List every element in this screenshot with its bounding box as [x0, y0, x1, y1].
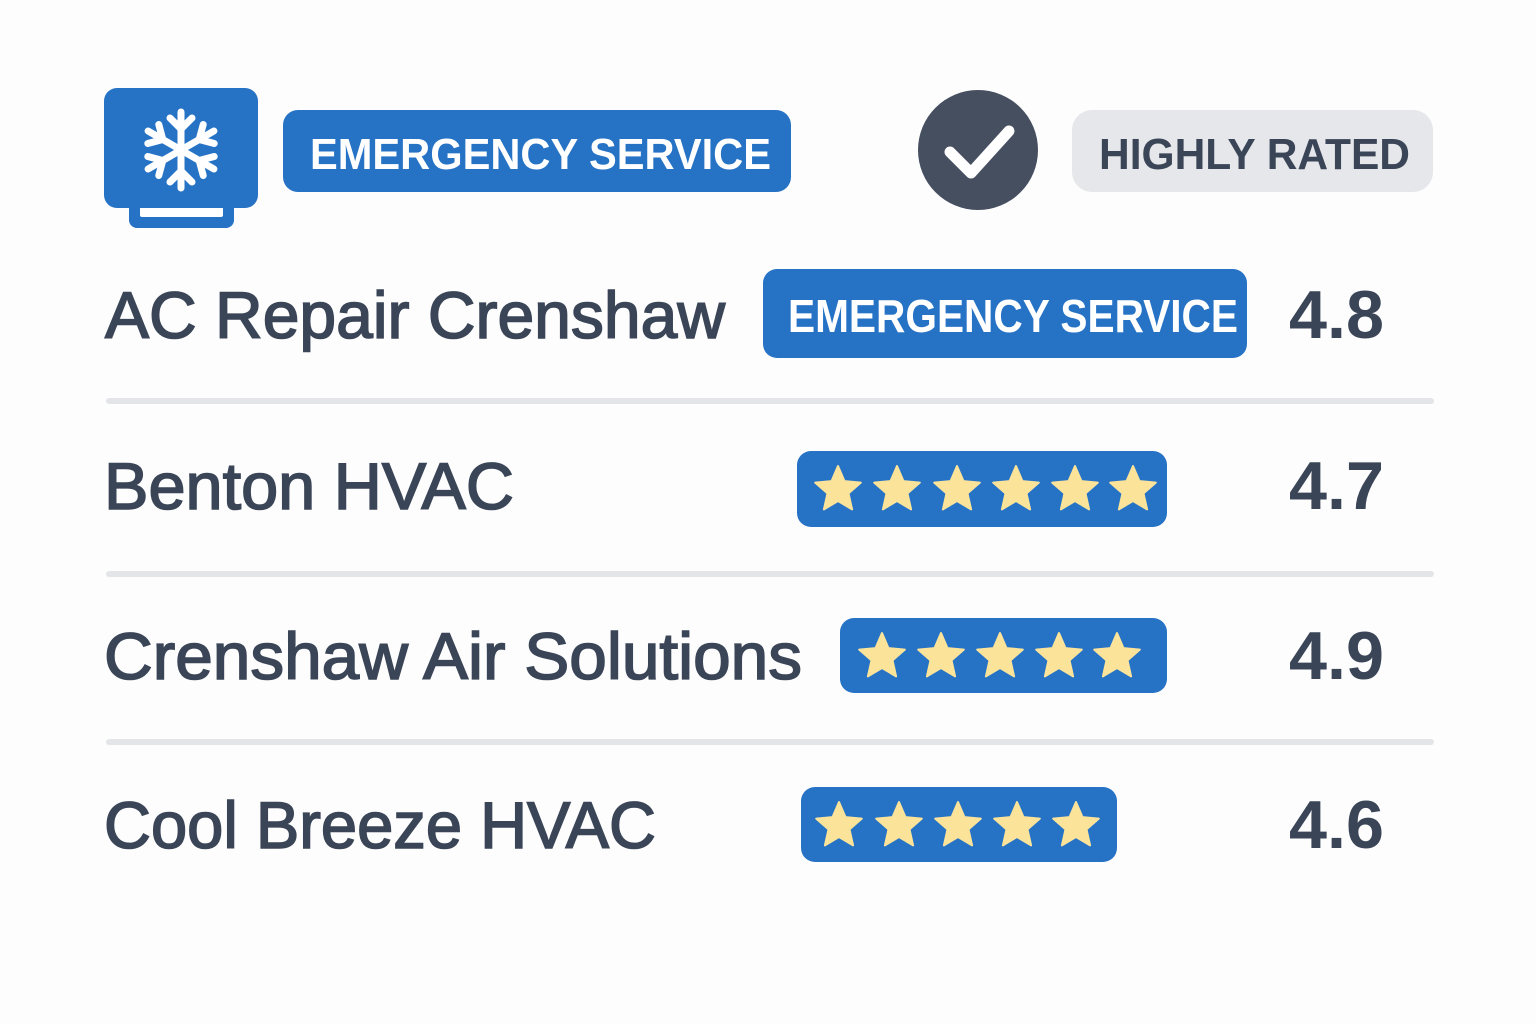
row: Benton HVAC: 4.7: [1289, 448, 1384, 524]
row: Crenshaw Air Solutions: [104, 618, 1384, 694]
row: Crenshaw Air Solutions: Crenshaw Air Solutions: [104, 619, 802, 693]
badge: emergency service header: [283, 110, 791, 192]
badge: emergency service header: EMERGENCY SERVICE: [310, 130, 771, 179]
row: Cool Breeze HVAC: [104, 787, 1384, 863]
row: Cool Breeze HVAC: 4.6: [1289, 787, 1384, 863]
icon: check circle: [918, 90, 1038, 210]
row: Benton HVAC: [104, 448, 1384, 527]
row: Benton HVAC: Benton HVAC: [104, 449, 514, 523]
badge: highly rated: [1072, 110, 1433, 192]
row: AC Repair Crenshaw: [105, 269, 1384, 358]
row: Crenshaw Air Solutions: 4.9: [1289, 618, 1384, 694]
row: Cool Breeze HVAC: Cool Breeze HVAC: [104, 788, 656, 862]
row: AC Repair Crenshaw: AC Repair Crenshaw: [105, 278, 725, 352]
row: AC Repair Crenshaw: 4.8: [1289, 277, 1384, 353]
row: AC Repair Crenshaw: EMERGENCY SERVICE: [788, 290, 1238, 342]
icon: AC unit with snowflake: [104, 88, 258, 228]
badge: highly rated: HIGHLY RATED: [1099, 130, 1410, 179]
